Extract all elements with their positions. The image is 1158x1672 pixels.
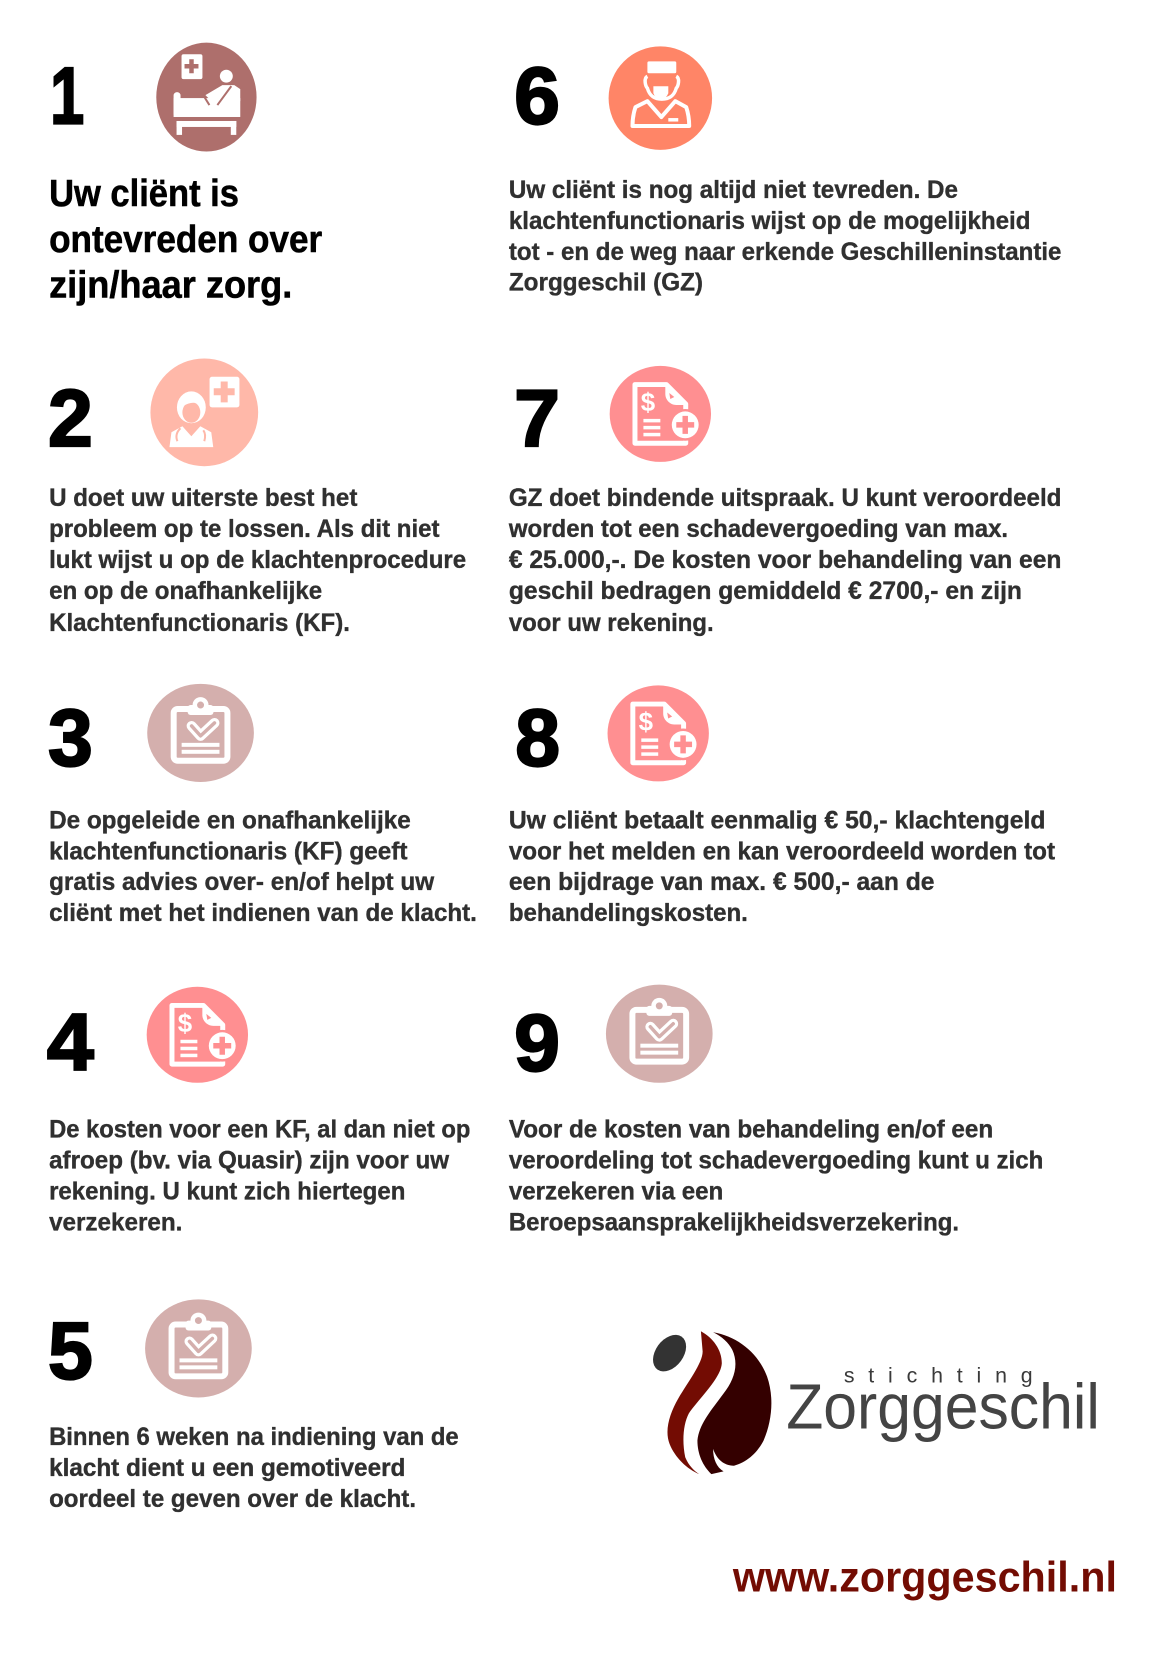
text block: lukt wijst u op de klachtenprocedure — [49, 546, 466, 574]
text block: U doet uw uiterste best het — [49, 484, 358, 512]
logo mark — [646, 1329, 771, 1474]
number 3: 3 — [48, 693, 93, 783]
text block: € 25.000,-. De kosten voor behandeling van een — [509, 546, 1061, 574]
text block — [508, 484, 1061, 637]
heading: Uw cliënt is ontevreden: ontevreden over — [49, 218, 323, 260]
number 1: 1 — [50, 52, 84, 142]
heading: Uw cliënt is ontevreden: zijn/haar zorg. — [49, 264, 292, 306]
text block — [49, 806, 477, 927]
number 6: 6 — [514, 52, 560, 142]
step 7 — [508, 366, 1061, 637]
text block: en op de onafhankelijke — [49, 577, 322, 605]
text block: klachtenfunctionaris wijst op de mogelijkheid — [509, 207, 1031, 235]
heading: Uw cliënt is ontevreden — [49, 172, 323, 306]
text block: verzekeren. — [49, 1209, 182, 1237]
step 9 — [509, 985, 1043, 1237]
text block: verzekeren via een — [509, 1178, 723, 1206]
number 9: 9 — [514, 999, 560, 1089]
step 6 — [509, 46, 1061, 297]
text block: GZ doet bindende uitspraak. U kunt veroordeeld — [509, 484, 1061, 512]
text block: tot - en de weg naar erkende Geschilleninstantie — [509, 238, 1061, 266]
logo: stichting Zorggeschil — [646, 1329, 1100, 1474]
text block — [509, 1116, 1043, 1237]
text block — [49, 484, 466, 637]
text block — [509, 806, 1056, 927]
text block: Uw cliënt is nog altijd niet tevreden. De — [509, 176, 958, 204]
icon: medical bill — [608, 685, 709, 781]
step 8 — [509, 685, 1056, 927]
step 2 — [48, 358, 466, 637]
step 4 — [47, 987, 470, 1237]
text block: gratis advies over- en/of helpt uw — [49, 868, 435, 896]
icon: patient in hospital bed — [156, 43, 257, 151]
icon: medical bill — [610, 366, 711, 462]
wordmark large: Zorggeschil — [786, 1370, 1100, 1442]
text block: Binnen 6 weken na indiening van de — [49, 1423, 459, 1451]
step 1 — [49, 43, 323, 306]
text block: De kosten voor een KF, al dan niet op — [49, 1116, 470, 1144]
heading: Uw cliënt is ontevreden: Uw cliënt is — [49, 172, 239, 214]
text block: voor uw rekening. — [509, 609, 714, 637]
text block: cliënt met het indienen van de klacht. — [49, 899, 477, 927]
step 3 — [48, 684, 477, 927]
text block: rekening. U kunt zich hiertegen — [49, 1178, 405, 1206]
text block — [509, 176, 1061, 297]
number 2: 2 — [48, 374, 93, 464]
icon: clipboard — [606, 985, 713, 1083]
number 7: 7 — [514, 374, 560, 464]
text block — [49, 1116, 470, 1237]
text block: voor het melden en kan veroordeeld worden tot — [509, 837, 1056, 865]
number 8: 8 — [515, 693, 560, 783]
text block: Uw cliënt betaalt eenmalig € 50,- klachtengeld — [509, 806, 1045, 834]
text block: Zorggeschil (GZ) — [509, 269, 703, 297]
text block: klacht dient u een gemotiveerd — [49, 1454, 405, 1482]
icon: clipboard — [147, 684, 254, 782]
icon: surgeon with mask — [609, 46, 712, 150]
text block: probleem op te lossen. Als dit niet — [49, 515, 440, 543]
step 5 — [48, 1299, 459, 1513]
icon: medical bill — [147, 987, 248, 1083]
text block: worden tot een schadevergoeding van max. — [508, 515, 1008, 543]
number 5: 5 — [48, 1306, 93, 1396]
text block: Voor de kosten van behandeling en/of een — [509, 1116, 993, 1144]
text block: Klachtenfunctionaris (KF). — [49, 609, 350, 637]
text block: klachtenfunctionaris (KF) geeft — [49, 837, 408, 865]
website url: www.zorggeschil.nl — [732, 1554, 1117, 1602]
text block: afroep (bv. via Quasir) zijn voor uw — [49, 1147, 450, 1175]
text block: een bijdrage van max. € 500,- aan de — [509, 868, 935, 896]
number 4: 4 — [47, 998, 94, 1088]
text block: Beroepsaansprakelijkheidsverzekering. — [509, 1209, 959, 1237]
text block: oordeel te geven over de klacht. — [49, 1485, 416, 1513]
icon: doctor with medical cross — [150, 358, 258, 466]
text block: behandelingskosten. — [509, 899, 748, 927]
icon: clipboard — [145, 1299, 252, 1398]
wordmark small: stichting — [844, 1364, 1033, 1388]
text block: geschil bedragen gemiddeld € 2700,- en zijn — [509, 577, 1022, 605]
text block: De opgeleide en onafhankelijke — [49, 806, 411, 834]
text block — [49, 1423, 459, 1513]
text block: veroordeling tot schadevergoeding kunt u zich — [509, 1147, 1043, 1175]
